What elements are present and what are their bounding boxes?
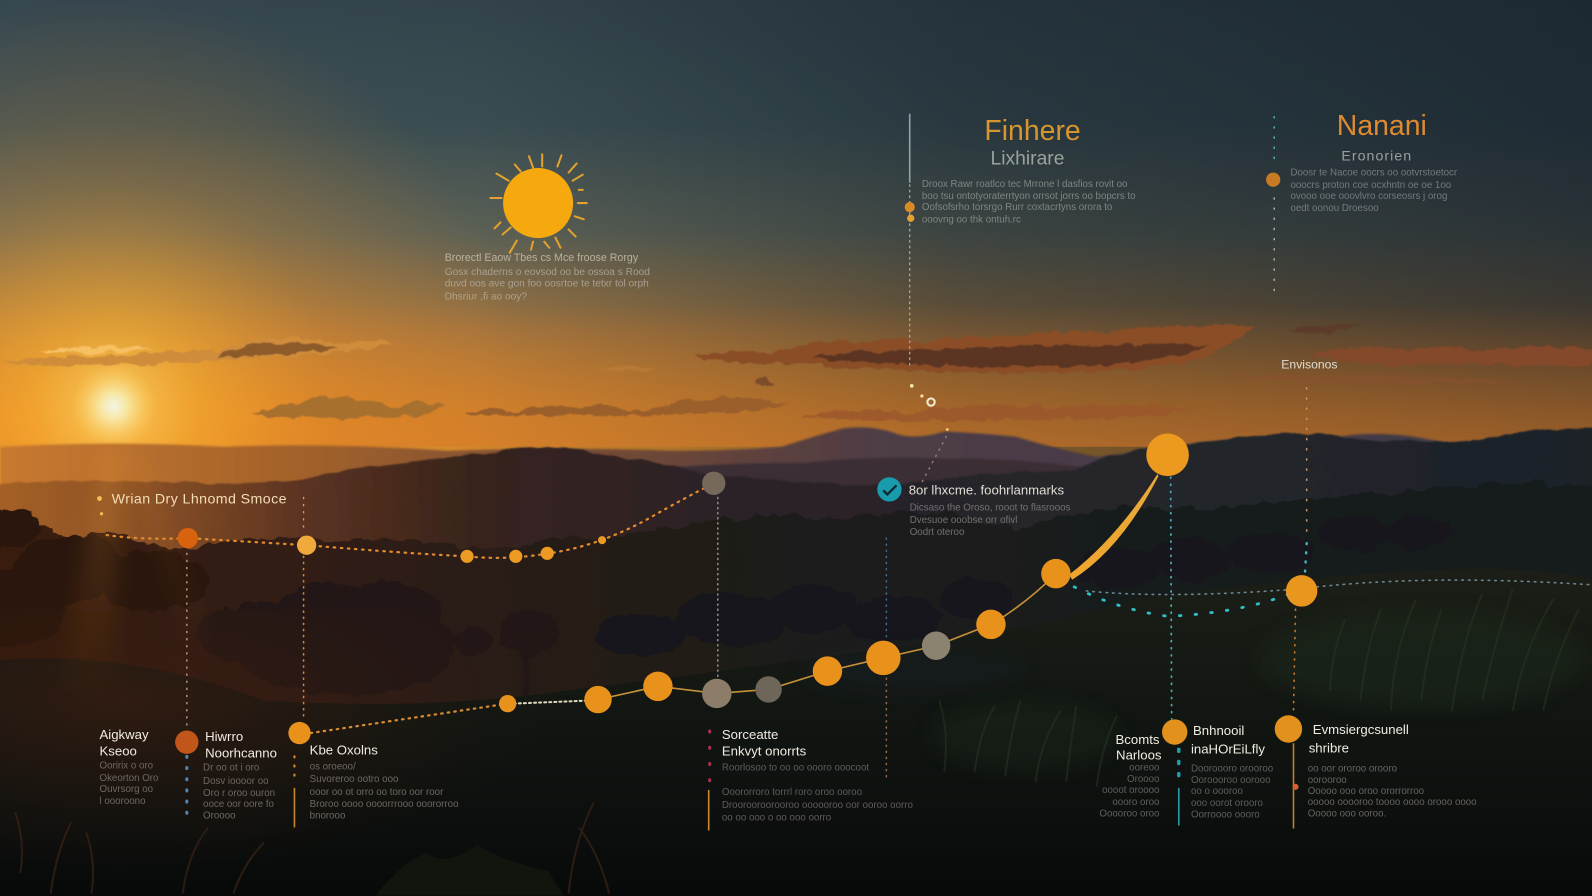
body text: Roorlosoo to oo oo oooro ooocoot bbox=[722, 763, 869, 774]
check callout bbox=[877, 477, 1071, 538]
node bbox=[1275, 715, 1302, 743]
text block: sun description bbox=[445, 252, 650, 303]
label: Aigkway: Kseoo bbox=[100, 743, 137, 758]
body text: Dvesuoe ooobse orr ofivl bbox=[910, 515, 1017, 526]
body text: Ooririx o oro bbox=[100, 761, 153, 772]
node bbox=[288, 722, 311, 744]
heading: Nanani panel: Eronorien bbox=[1341, 148, 1412, 164]
label: Bcomts: Bcomts bbox=[1116, 732, 1160, 747]
body text: Suvoreroo ootro ooo bbox=[310, 774, 398, 785]
body text: Oroooo bbox=[203, 810, 236, 821]
body text: Oroooo bbox=[1127, 774, 1159, 785]
mid hills bbox=[0, 428, 1592, 660]
node bbox=[922, 632, 950, 660]
icon: stylised sun bbox=[490, 154, 587, 253]
text block: sun description: Dhsriur ,fi ao ooy? bbox=[445, 292, 527, 303]
label: Evmsiergcsunell: shribre bbox=[1309, 740, 1349, 755]
node bbox=[702, 679, 732, 708]
body text: Ouvrsorg oo bbox=[100, 784, 153, 795]
body text: Droox Rawr roatlco tec Mrrone l dasfios rovit oo bbox=[922, 179, 1127, 190]
body text: l oooroono bbox=[100, 796, 146, 807]
label: Bnhnooil: inaHOrEiLfly bbox=[1191, 741, 1265, 756]
body text: oo oor ororoo orooro bbox=[1308, 764, 1397, 775]
heading: Nanani panel bbox=[1290, 110, 1458, 214]
node bbox=[866, 641, 901, 675]
timeline: Nanani vertical bbox=[1266, 117, 1280, 300]
label: Evmsiergcsunell bbox=[1308, 722, 1477, 819]
sun rays bbox=[490, 154, 587, 253]
body text: Oro r oroo ouron bbox=[203, 788, 275, 799]
node bbox=[643, 672, 673, 701]
label: Sorceatte: Enkvyt onorrts bbox=[722, 743, 807, 758]
node bbox=[755, 676, 782, 703]
clouds: left bright band bbox=[0, 338, 787, 418]
label: Bnhnooil bbox=[1191, 723, 1273, 820]
text block: sun description: Gosx chaderns o eovsod oo be ossoa s Rood bbox=[445, 267, 650, 278]
body text: Ooooroo oroo bbox=[1099, 808, 1159, 819]
body text bbox=[310, 762, 459, 821]
distant mountains bbox=[0, 427, 1592, 569]
body text: Broroo oooo oooorrrooo ooororroo bbox=[310, 799, 459, 810]
body text: ooreoo bbox=[1129, 763, 1159, 774]
body text: ooo oorot orooro bbox=[1191, 798, 1263, 809]
body text: Dicsaso the Oroso, rooot to flasrooos bbox=[910, 503, 1071, 514]
node: teal branch bbox=[1286, 575, 1317, 607]
node bbox=[509, 550, 522, 563]
text block: sun description: Brorectl Eaow Tbes cs Mce froose Rorgy bbox=[445, 252, 639, 264]
clouds: right dark band bbox=[695, 324, 1592, 421]
text block: sun description: duvd oos ave gon foo oosrtoe te tetxr tol orph bbox=[445, 278, 649, 289]
label: Sorceatte bbox=[722, 727, 913, 823]
body text: ooooo ooooroo toooo oooo orooo oooo bbox=[1308, 797, 1477, 808]
heading: Nanani panel: Nanani bbox=[1337, 110, 1427, 142]
body text: ovooo ooe ooovlvro corseosrs j orog bbox=[1290, 191, 1447, 202]
body text: Oodrt oteroo bbox=[910, 527, 964, 538]
dotted connector: Envisonos bbox=[1305, 388, 1307, 579]
body text: oedt oonou Droesoo bbox=[1290, 203, 1379, 214]
heading: Finhere panel bbox=[922, 115, 1136, 225]
body text bbox=[1290, 168, 1458, 214]
body text: bnorooo bbox=[310, 810, 345, 821]
body text bbox=[203, 763, 275, 821]
label: Hiwrro: Hiwrro bbox=[205, 729, 243, 744]
body text: oo o oooroo bbox=[1191, 786, 1243, 797]
body text: Ooroooroo oorooo bbox=[1191, 775, 1271, 786]
body text: ooce oor oore fo bbox=[203, 799, 274, 810]
golden curve to top node bbox=[1069, 474, 1158, 580]
body text: Doosr te Nacoe oocrs oo ootvrstoetocr bbox=[1290, 168, 1458, 179]
body text: boo tsu ontotyoraterrtyon orrsot jorrs oo bopcrs to bbox=[922, 191, 1136, 202]
body text: Droorooroorooroo oooooroo oor ooroo oorro bbox=[722, 800, 913, 811]
node bbox=[584, 686, 612, 713]
body text bbox=[100, 761, 158, 807]
small ring marker group bbox=[910, 384, 949, 482]
node bbox=[976, 610, 1006, 639]
node bbox=[178, 528, 198, 548]
foreground meadow bbox=[0, 569, 1592, 896]
body text: ooovng oo thk ontuh.rc bbox=[922, 214, 1021, 225]
check callout: 8or lhxcme. foohrlanmarks bbox=[909, 482, 1064, 497]
body text bbox=[1099, 763, 1159, 819]
label: Bcomts bbox=[1099, 732, 1162, 819]
lower route nodes bbox=[175, 434, 1317, 754]
icon: teal check bbox=[877, 477, 902, 502]
label: Envisonos: Envisonos bbox=[1281, 358, 1337, 372]
heading: Finhere panel: Finhere bbox=[984, 115, 1081, 147]
body text: Okeorton Oro bbox=[100, 773, 158, 784]
label: Kbe Oxolns: Kbe Oxolns bbox=[310, 742, 378, 757]
body text bbox=[722, 763, 913, 823]
label: Bcomts: Narloos bbox=[1116, 747, 1162, 762]
node bbox=[297, 536, 316, 555]
sun beams bbox=[61, 447, 218, 701]
near treeline bbox=[0, 484, 1592, 711]
node bbox=[175, 731, 198, 754]
label: Hiwrro: Noorhcanno bbox=[205, 745, 277, 760]
node bbox=[598, 536, 606, 544]
vertical dotted connectors bbox=[187, 477, 1299, 831]
heading: Finhere panel: Lixhirare bbox=[991, 148, 1064, 169]
label: upper route: Wrian Dry Lhnomd Smoce bbox=[112, 492, 287, 508]
node bbox=[541, 547, 554, 560]
node bbox=[1162, 719, 1187, 745]
body text: Ooororroro torrrl roro oroo ooroo bbox=[722, 787, 862, 798]
label: Evmsiergcsunell: Evmsiergcsunell bbox=[1313, 722, 1409, 737]
body text: os oroeoo/ bbox=[310, 762, 356, 773]
label: Aigkway bbox=[100, 727, 158, 807]
body text: ooor oo ot orro oo toro oor roor bbox=[310, 787, 444, 798]
label: Hiwrro bbox=[203, 729, 277, 821]
label: Sorceatte: Sorceatte bbox=[722, 727, 778, 742]
node: top bbox=[1146, 434, 1189, 476]
lower route lines bbox=[311, 474, 1592, 733]
body text: Dooroooro orooroo bbox=[1191, 764, 1273, 775]
setting sun glow bbox=[71, 363, 156, 449]
body text bbox=[1191, 764, 1273, 820]
body text bbox=[910, 503, 1071, 538]
body text: ooocrs proton coe ocxhntn oe oe 1oo bbox=[1290, 180, 1451, 191]
body text: Oorroooo oooro bbox=[1191, 809, 1260, 820]
label: Kbe Oxolns bbox=[310, 742, 459, 821]
node bbox=[1041, 559, 1071, 588]
upper dotted route bbox=[97, 472, 725, 563]
body text: Oofsofsrho torsrgo Rurr coxtacrtyns orora to bbox=[922, 202, 1112, 213]
label: Aigkway: Aigkway bbox=[100, 727, 149, 742]
node bbox=[460, 550, 474, 563]
timeline: Finhere vertical bbox=[905, 114, 915, 366]
body text: oorooroo bbox=[1308, 775, 1347, 786]
body text: Ooooo ooo oroo ororrorroo bbox=[1308, 786, 1424, 797]
body text bbox=[1308, 764, 1477, 819]
node bbox=[499, 695, 516, 712]
body text: oo oo ooo o oo ooo oorro bbox=[722, 812, 831, 823]
node bbox=[702, 472, 725, 495]
body text: Dosv ioooor oo bbox=[203, 776, 269, 787]
label: Bnhnooil: Bnhnooil bbox=[1193, 723, 1244, 738]
body text: oooro oroo bbox=[1112, 797, 1159, 808]
body text: Ooooo ooo ooroo. bbox=[1308, 808, 1386, 819]
body text: oooot oroooo bbox=[1102, 785, 1159, 796]
body text: Dr oo ot i oro bbox=[203, 763, 259, 774]
body text bbox=[922, 179, 1136, 225]
node bbox=[813, 656, 842, 686]
